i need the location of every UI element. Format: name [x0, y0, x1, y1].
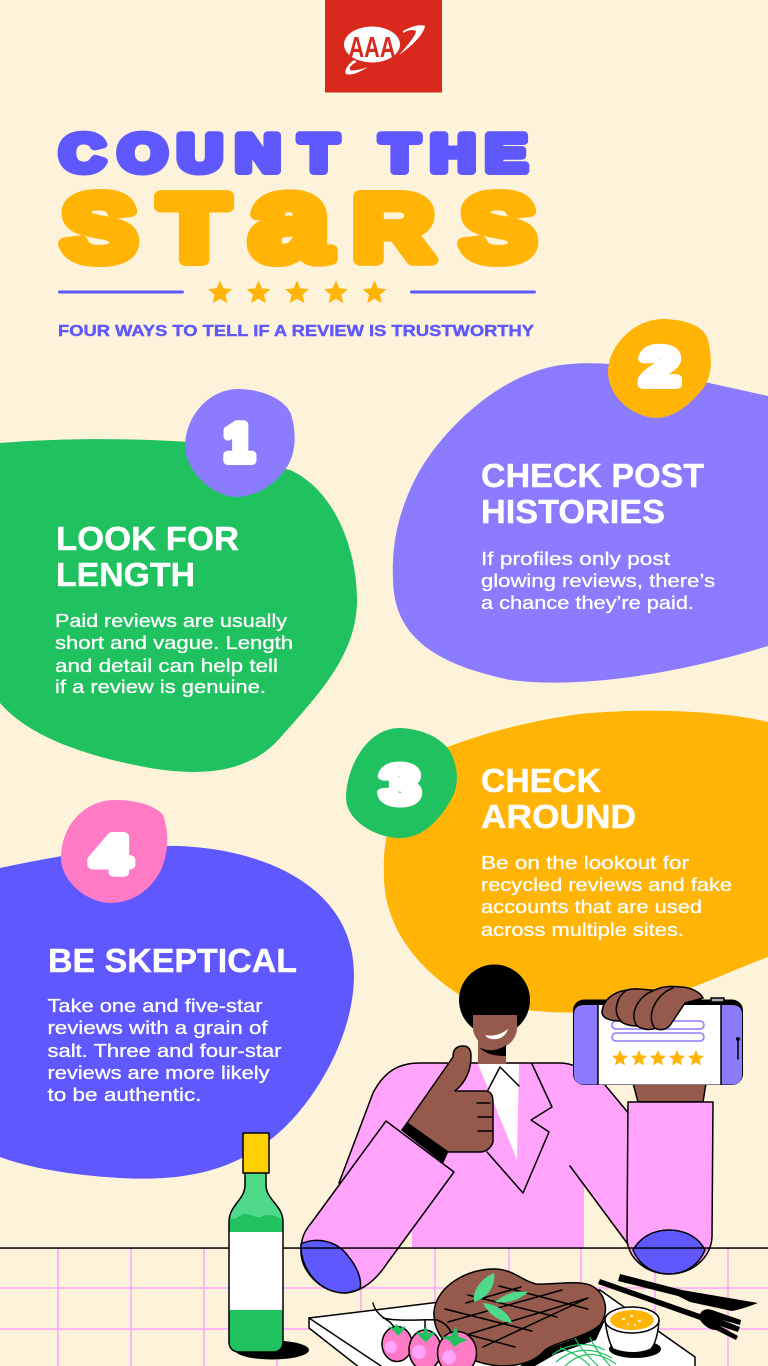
panel: step 2 check post histories [393, 319, 768, 683]
logo: AAA: AAA [348, 32, 396, 64]
title: Count the Stars [60, 125, 535, 286]
cutlery [598, 1274, 758, 1340]
steak with garnish [434, 1269, 606, 1366]
body text: short and vague. Length [55, 632, 293, 653]
body text: reviews with a grain of [48, 1017, 268, 1038]
hand holding phone [602, 986, 703, 1030]
plate edge [309, 1318, 381, 1366]
title: Count the Stars: T [160, 176, 228, 280]
torso [339, 1063, 630, 1248]
body text [481, 852, 732, 940]
head [459, 964, 530, 1064]
body text: glowing reviews, there’s [481, 570, 715, 591]
heading: LENGTH [56, 557, 195, 594]
subtitle: FOUR WAYS TO TELL IF A REVIEW IS TRUSTWORTHY [58, 323, 535, 340]
body text: and detail can help tell [55, 655, 278, 676]
body text [55, 610, 293, 697]
badge: number 1 [185, 389, 295, 497]
heading [56, 521, 239, 594]
logo: AAA [325, 0, 442, 92]
badge: number 4: 4 [92, 825, 130, 884]
badge: number 3 [346, 728, 457, 838]
heading: HISTORIES [481, 494, 665, 531]
body text: to be authentic. [48, 1084, 202, 1105]
star rating divider [58, 280, 536, 303]
cherry tomatoes [373, 1303, 476, 1366]
badge: number 2: 2 [641, 337, 679, 396]
phone with five star review [573, 998, 743, 1085]
body text: recycled reviews and fake [481, 874, 732, 895]
panel: step 1 look for length [0, 389, 357, 772]
title: Count the Stars: R [353, 176, 434, 280]
title: Count the Stars: S [461, 176, 535, 280]
title: Count the Stars: COUNT THE [60, 125, 527, 183]
body text [481, 548, 715, 613]
thumbs up hand [402, 1046, 493, 1162]
title: Count the Stars: S [62, 176, 136, 280]
heading [481, 763, 636, 836]
herb garnish [552, 1337, 616, 1366]
heading: CHECK [481, 763, 601, 800]
heading: AROUND [481, 799, 636, 836]
body text: reviews are more likely [48, 1062, 270, 1083]
body text: across multiple sites. [481, 919, 684, 940]
table grid [0, 1248, 768, 1366]
body text: accounts that are used [481, 896, 702, 917]
body text [48, 995, 282, 1105]
badge: number 4 [61, 800, 167, 903]
body text: Take one and five-star [48, 995, 262, 1016]
badge: number 3: 3 [381, 755, 419, 814]
body text: If profiles only post [481, 548, 671, 569]
heading: CHECK POST [481, 458, 705, 495]
body text: a chance they’re paid. [481, 592, 694, 613]
body text: if a review is genuine. [55, 676, 266, 697]
sauce ramekin [605, 1307, 661, 1358]
plate [309, 1290, 695, 1366]
right forearm [633, 1083, 706, 1102]
title: Count the Stars: a [250, 152, 331, 286]
heading: BE SKEPTICAL [48, 943, 297, 980]
right sleeve [627, 1102, 713, 1274]
body text: salt. Three and four-star [48, 1040, 282, 1061]
panel: step 4 be skeptical [0, 800, 354, 1179]
bottle [229, 1133, 309, 1360]
body text: Be on the lookout for [481, 852, 689, 873]
panel: step 3 check around [346, 711, 768, 1013]
left sleeve [301, 1121, 454, 1293]
badge: number 2 [608, 319, 711, 418]
heading [481, 458, 705, 531]
shirt and lapels [478, 1064, 552, 1193]
table edge [0, 1247, 768, 1249]
heading: LOOK FOR [56, 521, 239, 558]
illustration: person giving thumbs up [301, 964, 743, 1293]
badge: number 1: 1 [225, 414, 253, 472]
body text: Paid reviews are usually [55, 610, 288, 631]
